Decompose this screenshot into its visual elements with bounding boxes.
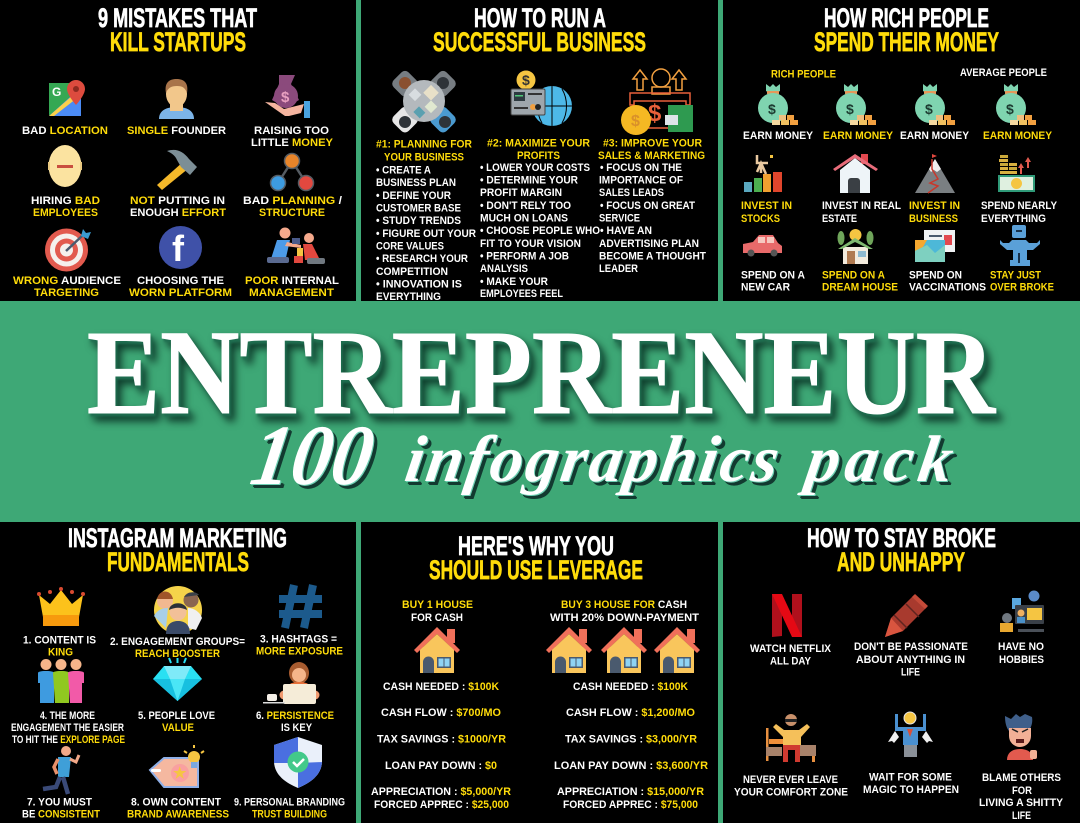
labels: spend row: SPEND ON xyxy=(909,270,962,282)
icon: runner xyxy=(43,746,79,794)
column: buy one house stats: APPRECIATION : $5,000/YR xyxy=(371,786,511,798)
label: own content brand awareness: BRAND AWARENESS xyxy=(127,808,229,820)
heading: 9 mistakes xyxy=(98,3,257,57)
label: watch netflix: ALL DAY xyxy=(770,656,811,668)
label: single founder: SINGLE FOUNDER xyxy=(127,125,226,137)
label: wrong audience targeting: WRONG AUDIENCE xyxy=(13,275,122,287)
label: rich people: RICH PEOPLE xyxy=(771,68,836,80)
label: engagement explore page: TO HIT THE EXPLORE PAGE xyxy=(12,734,125,746)
label: choosing the worn platform: CHOOSING THE xyxy=(137,275,225,287)
column 1: planning xyxy=(376,138,476,303)
heading: run a business: HOW TO RUN A xyxy=(474,3,606,33)
title: entrepreneur: ENTREPRENEUR xyxy=(87,306,996,440)
label: don't be passionate: DON'T BE PASSIONATE xyxy=(854,641,968,653)
column 1: planning: COMPETITION xyxy=(376,266,448,278)
icon: dream house xyxy=(838,229,874,264)
subtitle: 100 infographics pack xyxy=(245,407,958,503)
column 3: sales: BECOME A THOUGHT xyxy=(599,250,706,262)
label: have no hobbies xyxy=(998,641,1044,666)
icon: card and globe xyxy=(511,70,572,126)
label: personal branding trust building: TRUST BUILDING xyxy=(252,808,327,820)
labels: invest row: INVEST IN REAL xyxy=(822,200,901,212)
icon: money bag 3: $ xyxy=(925,101,933,117)
label: content is king: KING xyxy=(48,646,73,658)
label: raising too little money: LITTLE MONEY xyxy=(251,137,334,149)
column: buy one house stats: CASH FLOW : $700/MO xyxy=(381,707,501,719)
label: engagement explore page: 4. THE MORE xyxy=(40,710,95,722)
label: bad planning / structure xyxy=(243,195,342,219)
icon: crown xyxy=(37,587,85,626)
icon: card and globe: $ xyxy=(522,72,530,88)
heading: leverage: HERE'S WHY YOU xyxy=(458,531,614,561)
column 1: planning: • CREATE A xyxy=(376,164,431,176)
label: hiring bad employees: EMPLOYEES xyxy=(33,207,98,219)
icon: real estate house xyxy=(833,154,878,193)
banner: title xyxy=(87,306,996,503)
column 1: planning: • STUDY TRENDS xyxy=(376,215,461,227)
label: wait for some magic: MAGIC TO HAPPEN xyxy=(863,784,959,796)
icon: money bag 3 xyxy=(915,84,955,125)
column 1: planning: • FIGURE OUT YOUR xyxy=(376,228,476,240)
label: content is king: 1. CONTENT IS xyxy=(23,634,96,646)
label: choosing the worn platform: WORN PLATFORM xyxy=(129,287,232,299)
label: watch netflix xyxy=(750,643,831,668)
column 3: sales: • FOCUS ON THE xyxy=(600,162,682,174)
column 1: planning: #1: PLANNING FOR xyxy=(376,138,472,150)
column 1: planning: • INNOVATION IS xyxy=(376,278,463,290)
column: buy three houses stats: CASH FLOW : $1,200/MO xyxy=(566,707,695,719)
column 2: profits: PROFITS xyxy=(517,150,560,162)
label: you must be consistent xyxy=(22,796,100,820)
labels: invest row: INVEST IN xyxy=(909,200,960,212)
labels: spend row: SPEND ON A xyxy=(741,270,805,282)
heading: rich people xyxy=(814,3,999,57)
label: blame others: FOR xyxy=(1012,785,1032,797)
heading: instagram: INSTAGRAM MARKETING xyxy=(68,523,287,553)
column 2: profits: ANALYSIS xyxy=(480,263,528,275)
icon: hobbies screen xyxy=(1000,590,1044,632)
label: own content brand awareness xyxy=(127,796,229,820)
label: blame others: BLAME OTHERS xyxy=(982,772,1061,784)
label: engagement explore page: ENGAGEMENT THE EASIER xyxy=(11,722,124,734)
label: persistence is key: IS KEY xyxy=(281,722,312,734)
column 3: sales: • HAVE AN xyxy=(600,225,652,237)
heading: leverage xyxy=(429,531,643,585)
label: bad planning / structure: STRUCTURE xyxy=(259,207,326,219)
label: hashtags xyxy=(256,634,343,658)
icon: netflix xyxy=(772,594,802,637)
column 1: planning: BUSINESS PLAN xyxy=(376,177,456,189)
column 2: profits: PROFIT MARGIN xyxy=(480,187,562,199)
label: engagement groups xyxy=(110,636,245,660)
icon: money bag 1: $ xyxy=(768,101,776,117)
column 2: profits: • LOWER YOUR COSTS xyxy=(480,162,590,174)
icon: car xyxy=(743,235,782,256)
panel: why use leverage xyxy=(361,522,718,823)
label: engagement explore page xyxy=(11,710,125,746)
column 1: planning: EVERYTHING xyxy=(376,291,441,303)
label: don't be passionate xyxy=(854,641,968,678)
icon: meeting table xyxy=(390,69,458,135)
icon: sales and marketing: $ xyxy=(648,100,662,127)
icon: money bag on hand xyxy=(265,75,310,118)
heading: stay broke: AND UNHAPPY xyxy=(837,547,965,577)
label: you must be consistent: 7. YOU MUST xyxy=(27,796,92,808)
label: raising too little money xyxy=(251,125,334,149)
column: buy three houses stats: APPRECIATION : $15,000/YR xyxy=(557,786,704,798)
label: personal branding trust building: 9. PERSONAL BRANDING xyxy=(234,796,345,808)
label: earn money row: EARN MONEY xyxy=(983,130,1052,142)
icon: house 4 xyxy=(654,627,700,673)
label: bad planning / structure: BAD PLANNING / xyxy=(243,195,342,207)
column 3: sales: IMPORTANCE OF xyxy=(599,174,683,186)
panel: 9 mistakes that kill startups xyxy=(0,0,356,301)
column 2: profits: #2: MAXIMIZE YOUR xyxy=(487,138,590,150)
column 2: profits xyxy=(480,138,600,300)
label: hiring bad employees xyxy=(31,195,100,219)
label: hiring bad employees: HIRING BAD xyxy=(31,195,100,207)
icon: tag with bulb xyxy=(150,745,204,787)
labels: spend row: STAY JUST xyxy=(990,270,1041,282)
label: poor internal management: POOR INTERNAL xyxy=(245,275,339,287)
column: buy one house stats: LOAN PAY DOWN : $0 xyxy=(385,760,497,772)
column 3: sales xyxy=(598,138,706,275)
column 3: sales: • FOCUS ON GREAT xyxy=(600,200,695,212)
label: blame others: LIFE xyxy=(1012,810,1031,822)
label: personal branding trust building xyxy=(234,796,345,820)
icon: money bag 2 xyxy=(836,84,876,125)
subtitle: 100 infographics pack: pack xyxy=(797,423,958,496)
label: persistence is key xyxy=(256,710,334,734)
column: buy three houses stats: LOAN PAY DOWN : $3,600/YR xyxy=(554,760,708,772)
icon: hashtag xyxy=(279,585,322,628)
label: hashtags: MORE EXPOSURE xyxy=(256,646,343,658)
label: never ever leave xyxy=(734,774,848,798)
labels: spend row: SPEND ON A xyxy=(822,270,885,282)
labels: invest row: SPEND NEARLY xyxy=(981,200,1057,212)
icon: shield xyxy=(274,737,322,788)
icon: three people xyxy=(38,659,84,703)
column 1: planning: YOUR BUSINESS xyxy=(384,152,464,164)
labels: invest row: INVEST IN xyxy=(741,200,792,212)
label: not putting in enough effort: NOT PUTTING IN xyxy=(130,195,225,207)
label: buy 1 house xyxy=(402,599,473,624)
labels: invest row: ESTATE xyxy=(822,213,857,225)
label: earn money row: EARN MONEY xyxy=(823,130,893,142)
label: buy 3 house xyxy=(550,599,699,624)
label: people love value: VALUE xyxy=(162,722,194,734)
icon: tag with bulb: ★ xyxy=(173,765,187,782)
heading: run a business: SUCCESSFUL BUSINESS xyxy=(433,27,646,57)
label: buy 1 house: FOR CASH xyxy=(411,612,463,624)
column: buy one house stats xyxy=(371,681,511,811)
icon: facebook: f xyxy=(172,228,185,269)
heading: leverage: SHOULD USE LEVERAGE xyxy=(429,555,643,585)
icon: facebook xyxy=(159,226,202,269)
labels: invest row: STOCKS xyxy=(741,213,780,225)
icon: sales and marketing: $ xyxy=(631,113,640,130)
label: have no hobbies: HAVE NO xyxy=(998,641,1044,653)
label: earn money row: EARN MONEY xyxy=(900,130,969,142)
icon: engagement group xyxy=(154,586,202,634)
icon: money bag 2: $ xyxy=(846,101,854,117)
label: never ever leave: NEVER EVER LEAVE xyxy=(743,774,838,786)
icon: money bag 4 xyxy=(996,84,1036,125)
label: poor internal management xyxy=(245,275,339,299)
heading: run a business xyxy=(433,3,646,57)
column: buy three houses stats xyxy=(554,681,708,811)
label: not putting in enough effort xyxy=(130,195,226,219)
panel: how to run a successful business xyxy=(361,0,718,303)
subtitle: 100 infographics pack: 100 xyxy=(245,407,380,503)
panel: instagram marketing fundamentals xyxy=(0,522,356,823)
column: buy three houses stats: CASH NEEDED : $100K xyxy=(573,681,688,693)
label: watch netflix: WATCH NETFLIX xyxy=(750,643,831,655)
column 2: profits: • DON'T RELY TOO xyxy=(480,200,571,212)
column: buy one house stats: CASH NEEDED : $100K xyxy=(383,681,499,693)
subtitle: 100 infographics pack: infographics xyxy=(401,423,784,496)
label: people love value: 5. PEOPLE LOVE xyxy=(138,710,215,722)
label: have no hobbies: HOBBIES xyxy=(999,654,1044,666)
labels: spend row: OVER BROKE xyxy=(990,282,1054,294)
label: wait for some magic xyxy=(863,772,959,796)
label: wait for some magic: WAIT FOR SOME xyxy=(869,772,952,784)
icon: stock bars xyxy=(744,155,782,192)
column 1: planning: CUSTOMER BASE xyxy=(376,202,461,214)
label: never ever leave: YOUR COMFORT ZONE xyxy=(734,786,848,798)
label: blame others: LIVING A SHITTY xyxy=(979,797,1063,809)
label: average people: AVERAGE PEOPLE xyxy=(960,67,1047,79)
label: own content brand awareness: 8. OWN CONTENT xyxy=(131,796,221,808)
column: buy one house stats: FORCED APPREC : $25,000 xyxy=(374,799,509,811)
icon: people building blocks xyxy=(267,228,325,264)
heading: stay broke xyxy=(807,523,996,577)
label: raising too little money: RAISING TOO xyxy=(254,125,329,137)
icon: money bag 4: $ xyxy=(1006,101,1014,117)
label: content is king xyxy=(23,634,96,658)
label: you must be consistent: BE CONSISTENT xyxy=(22,808,100,820)
label: people love value xyxy=(138,710,215,734)
column 1: planning: • RESEARCH YOUR xyxy=(376,253,468,265)
labels: spend row: NEW CAR xyxy=(741,282,790,294)
icon: person in bed xyxy=(766,714,816,762)
icon: diamond xyxy=(153,658,202,701)
label: wrong audience targeting: TARGETING xyxy=(34,287,99,299)
icon: blank face xyxy=(48,145,82,187)
label: hashtags: 3. HASHTAGS = xyxy=(260,634,337,646)
labels: spend row: DREAM HOUSE xyxy=(822,282,898,294)
icon: cash and coins xyxy=(999,155,1034,191)
column: buy three houses stats: FORCED APPREC : $75,000 xyxy=(563,799,698,811)
column 2: profits: • CHOOSE PEOPLE WHO xyxy=(480,225,600,237)
column 3: sales: SALES & MARKETING xyxy=(598,150,705,162)
labels: spend row: VACCINATIONS xyxy=(909,282,986,294)
labels: invest row: BUSINESS xyxy=(909,213,958,225)
heading: rich people: HOW RICH PEOPLE xyxy=(824,3,989,33)
label: earn money row xyxy=(743,130,1052,142)
label: engagement groups: 2. ENGAGEMENT GROUPS= xyxy=(110,636,245,648)
column 1: planning: CORE VALUES xyxy=(376,240,444,252)
icon: map: G xyxy=(52,85,61,99)
heading: 9 mistakes: 9 MISTAKES THAT xyxy=(98,3,257,33)
icon: house 2 xyxy=(546,627,592,673)
icon: money bag on hand: $ xyxy=(281,89,290,106)
icon: angry man xyxy=(1005,714,1037,760)
column 2: profits: EMPLOYEES FEEL xyxy=(480,288,563,300)
labels: spend row xyxy=(741,270,1054,294)
label: not putting in enough effort: ENOUGH EFFORT xyxy=(130,207,226,219)
column 2: profits: • MAKE YOUR xyxy=(480,276,548,288)
column 2: profits: MUCH ON LOANS xyxy=(480,212,568,224)
icon: mountain xyxy=(915,154,955,193)
column 2: profits: • PERFORM A JOB xyxy=(480,250,569,262)
icon: person at laptop xyxy=(263,662,320,704)
heading: instagram xyxy=(68,523,287,577)
label: poor internal management: MANAGEMENT xyxy=(249,287,334,299)
column 3: sales: #3: IMPROVE YOUR xyxy=(603,138,702,150)
label: choosing the worn platform xyxy=(129,275,232,299)
icon: shrug robot man xyxy=(1000,225,1040,266)
icon: person xyxy=(159,79,194,119)
label: persistence is key: 6. PERSISTENCE xyxy=(256,710,334,722)
column 1: planning: • DEFINE YOUR xyxy=(376,190,451,202)
label: don't be passionate: LIFE xyxy=(901,666,920,678)
labels: invest row xyxy=(741,200,1057,225)
panel: how rich people spend their money xyxy=(723,0,1080,301)
column 3: sales: SERVICE xyxy=(599,212,640,224)
label: buy 3 house: BUY 3 HOUSE FOR CASH xyxy=(561,599,687,611)
icon: map xyxy=(49,80,85,116)
icon: charts on vaccination xyxy=(915,230,955,262)
labels: invest row: EVERYTHING xyxy=(981,213,1046,225)
icon: sales and marketing xyxy=(621,69,693,135)
label: wrong audience targeting xyxy=(13,275,122,299)
column: buy three houses stats: TAX SAVINGS : $3,000/YR xyxy=(565,734,697,746)
panel: how to stay broke and unhappy xyxy=(723,522,1080,823)
icon: money bag 1 xyxy=(758,84,798,125)
heading: 9 mistakes: KILL STARTUPS xyxy=(110,27,246,57)
label: buy 1 house: BUY 1 HOUSE xyxy=(402,599,473,611)
icon: org structure nodes xyxy=(270,154,314,190)
label: engagement groups: REACH BOOSTER xyxy=(135,648,220,660)
column 3: sales: ADVERTISING PLAN xyxy=(599,238,699,250)
icon: house 1 xyxy=(414,627,460,673)
label: buy 3 house: WITH 20% DOWN-PAYMENT xyxy=(550,612,699,624)
icon: house 3 xyxy=(601,627,647,673)
icon: hammer xyxy=(157,150,197,190)
column 3: sales: SALES LEADS xyxy=(599,187,664,199)
column 2: profits: FIT TO YOUR VISION xyxy=(480,238,581,250)
label: earn money row: EARN MONEY xyxy=(743,130,813,142)
column 2: profits: • DETERMINE YOUR xyxy=(480,174,578,186)
heading: instagram: FUNDAMENTALS xyxy=(107,547,249,577)
label: don't be passionate: ABOUT ANYTHING IN xyxy=(856,654,965,666)
column: buy one house stats: TAX SAVINGS : $1000/YR xyxy=(377,734,506,746)
icon: target xyxy=(45,228,91,272)
icon: crayon xyxy=(885,594,928,637)
label: blame others xyxy=(979,772,1063,822)
icon: magic businessman with bulb xyxy=(888,712,933,757)
column 3: sales: LEADER xyxy=(599,263,638,275)
label: bad location: BAD LOCATION xyxy=(22,125,108,137)
